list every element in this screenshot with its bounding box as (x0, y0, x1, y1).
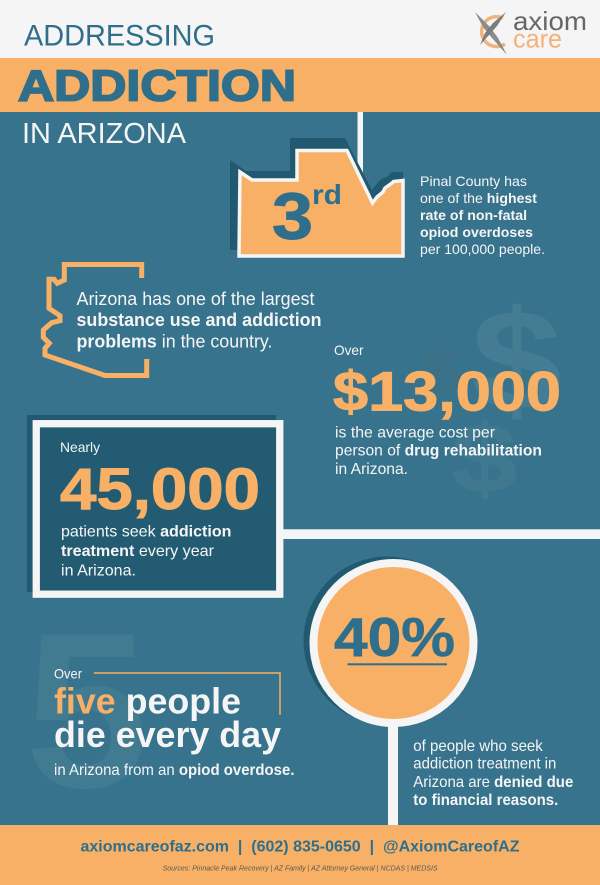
text: rehab description (335, 424, 542, 478)
bracket line (94, 673, 280, 715)
stat: die every day: die every day (54, 714, 281, 755)
box shadow (27, 415, 276, 592)
icon: arizona outline (43, 264, 147, 376)
logo wordmark: care: care (513, 24, 562, 54)
text: pinal county description: Pinal County has (420, 173, 527, 189)
panel: 40 percent (304, 556, 573, 825)
text: denied description: to financial reasons. (413, 792, 558, 809)
text: arizona statement: Arizona has one of the largest (76, 289, 314, 309)
icon: logo mark (475, 12, 507, 55)
panel: 45,000 patients (27, 415, 280, 594)
icon: ghost dollar signs: $ (471, 281, 562, 440)
stat: 3rd (272, 179, 342, 253)
stat: five people: five people (54, 680, 241, 721)
stat: 3rd: rd (312, 179, 342, 210)
text: rehab description: in Arizona. (335, 461, 408, 478)
county shadow (230, 138, 403, 250)
text: arizona statement (76, 289, 322, 352)
text: overdose description: in Arizona from an opiod overdose. (54, 762, 294, 779)
box (36, 424, 280, 594)
circle stem (388, 720, 398, 825)
text: patients description: patients seek addiction (61, 524, 232, 541)
text: arizona statement: problems in the country. (76, 332, 272, 352)
text: denied description (413, 738, 573, 809)
panel: rehab cost (333, 281, 562, 513)
circle shadow (304, 556, 472, 724)
heading: in arizona: IN ARIZONA (22, 118, 187, 150)
text: patients description: treatment every year (61, 543, 215, 560)
text: denied description: Arizona are denied due (413, 774, 573, 791)
panel: arizona statement (43, 264, 322, 376)
divider bar (283, 529, 600, 539)
icon: ghost number five: 5 (25, 587, 148, 835)
text: rehab description: is the average cost per (335, 424, 496, 442)
icon: ghost dollar signs: $ (451, 404, 518, 513)
text: nearly: Nearly (60, 439, 100, 455)
panel: pinal county (230, 138, 545, 257)
icon: ghost dollar signs (422, 281, 562, 513)
text: patients description: in Arizona. (61, 563, 136, 580)
text: pinal county description (420, 173, 545, 257)
logo: axiom care (475, 6, 587, 55)
text: pinal county description: per 100,000 people. (420, 241, 545, 257)
text: over: Over (54, 665, 82, 681)
heading: addressing: ADDRESSING (24, 20, 215, 52)
title band (0, 58, 600, 112)
header: light strip (0, 0, 600, 58)
text: denied description: addiction treatment in (413, 756, 556, 772)
text: patients description (61, 524, 232, 580)
text: pinal county description: opiod overdoses (420, 224, 533, 240)
logo wordmark: axiom: axiom (513, 6, 587, 36)
heading: addiction: ADDICTION (18, 62, 296, 110)
text: rehab description: person of drug rehabilitation (335, 442, 542, 460)
panel: overdose deaths (25, 587, 294, 835)
stat: 40%: 40% (334, 606, 455, 668)
footer contact line: axiomcareofaz.com | (602) 835-0650 | @AxiomCareofAZ (80, 839, 520, 856)
stat: $13,000: $13,000 (333, 360, 561, 422)
circle (314, 563, 474, 723)
stat: 3rd: 3 (272, 179, 313, 253)
stat underline (348, 663, 447, 665)
stat: 45,000: 45,000 (60, 457, 260, 522)
text: pinal county description: one of the highest (420, 190, 537, 206)
text: denied description: of people who seek (413, 738, 544, 755)
text: pinal county description: rate of non-fatal (420, 207, 527, 223)
text: over: Over (334, 342, 364, 358)
text: arizona statement: substance use and addiction (76, 310, 322, 330)
icon: ghost dollar signs: $ (422, 337, 462, 404)
connector line from band to county (358, 112, 363, 197)
county shape (239, 150, 403, 256)
footer band (0, 825, 600, 885)
footer sources: Sources: Pinnacle Peak Recovery | AZ Family | AZ Attorney General | NCDAS | MEDSIS (163, 864, 438, 873)
